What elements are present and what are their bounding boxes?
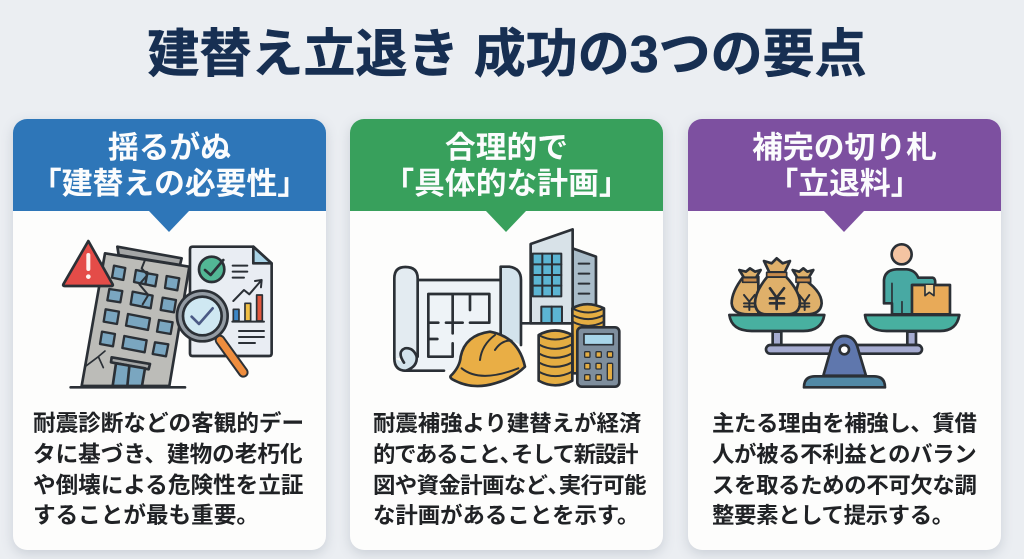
- heading: 立退料: 補完の切り札: [752, 130, 937, 165]
- heading: 建替えの必要性: 「建替えの必要性」: [31, 166, 308, 201]
- heading: 立退料: [688, 119, 1001, 211]
- heading: 建替えの必要性: [13, 119, 326, 211]
- icon: tenant with box: [884, 244, 950, 314]
- text block: 建替えの必要性: [33, 411, 304, 528]
- icon: blueprint, helmet, tower, coins and calculator: [394, 229, 619, 387]
- icon: blueprint roll: [394, 267, 521, 371]
- text block: 建替えの必要性: や倒壊による危険性を立証: [33, 473, 303, 498]
- panel: 補完の切り札「立退料」: [688, 119, 1001, 550]
- heading: 具体的な計画: [350, 119, 663, 211]
- icon: leaning cracked building with warning and inspected report: [63, 241, 272, 387]
- heading: 具体的な計画: 合理的で: [445, 130, 568, 165]
- icon: scale base: [766, 332, 922, 387]
- icon: balance scale with money bags and tenant: [729, 244, 959, 387]
- pointer: blue: [149, 211, 189, 232]
- text block: 立退料: スを取るための不可欠な調: [712, 473, 976, 498]
- text block: 具体的な計画: 図や資金計画など、実行可能: [373, 473, 646, 498]
- text block: 具体的な計画: [373, 411, 646, 528]
- icon: magnifying glass: [177, 291, 243, 372]
- text block: 立退料: 人が被る不利益とのバラン: [712, 442, 976, 467]
- pointer: green: [486, 211, 526, 232]
- panel: 揺るがぬ「建替えの必要性」: [13, 119, 326, 550]
- text block: 建替えの必要性: タに基づき、建物の老朽化: [33, 442, 303, 467]
- text block: 具体的な計画: 耐震補強より建替えが経済: [373, 411, 641, 436]
- text block: 建替えの必要性: 耐震診断などの客観的デー: [33, 411, 304, 436]
- icon: hard hat: [450, 332, 525, 386]
- icon: coin stacks: [539, 304, 604, 385]
- icon: report document: [190, 247, 272, 356]
- heading: 建替えの必要性: 揺るがぬ: [108, 130, 231, 165]
- text block: 具体的な計画: 的であること、そして新設計: [373, 442, 637, 467]
- icon: office tower: [522, 229, 596, 323]
- title: 建替え立退き 成功の3つの要点: [147, 26, 867, 84]
- icon: warning triangle: [63, 241, 113, 286]
- text block: 建替えの必要性: することが最も重要。: [33, 503, 259, 528]
- text block: 立退料: 整要素として提示する。: [712, 503, 954, 528]
- panel: 合理的で「具体的な計画」: [350, 119, 663, 550]
- text block: 立退料: 主たる理由を補強し、賃借: [712, 411, 976, 436]
- icon: money bags: [732, 258, 822, 314]
- text block: 具体的な計画: な計画があることを示す。: [373, 503, 639, 528]
- heading: 立退料: 「立退料」: [768, 166, 921, 201]
- text block: 立退料: [712, 411, 976, 528]
- pointer: purple: [824, 211, 864, 232]
- icon: scale pans: [729, 315, 959, 331]
- heading: 具体的な計画: 「具体的な計画」: [383, 166, 630, 201]
- icon: calculator: [577, 327, 619, 387]
- icon: leaning building: [71, 247, 189, 387]
